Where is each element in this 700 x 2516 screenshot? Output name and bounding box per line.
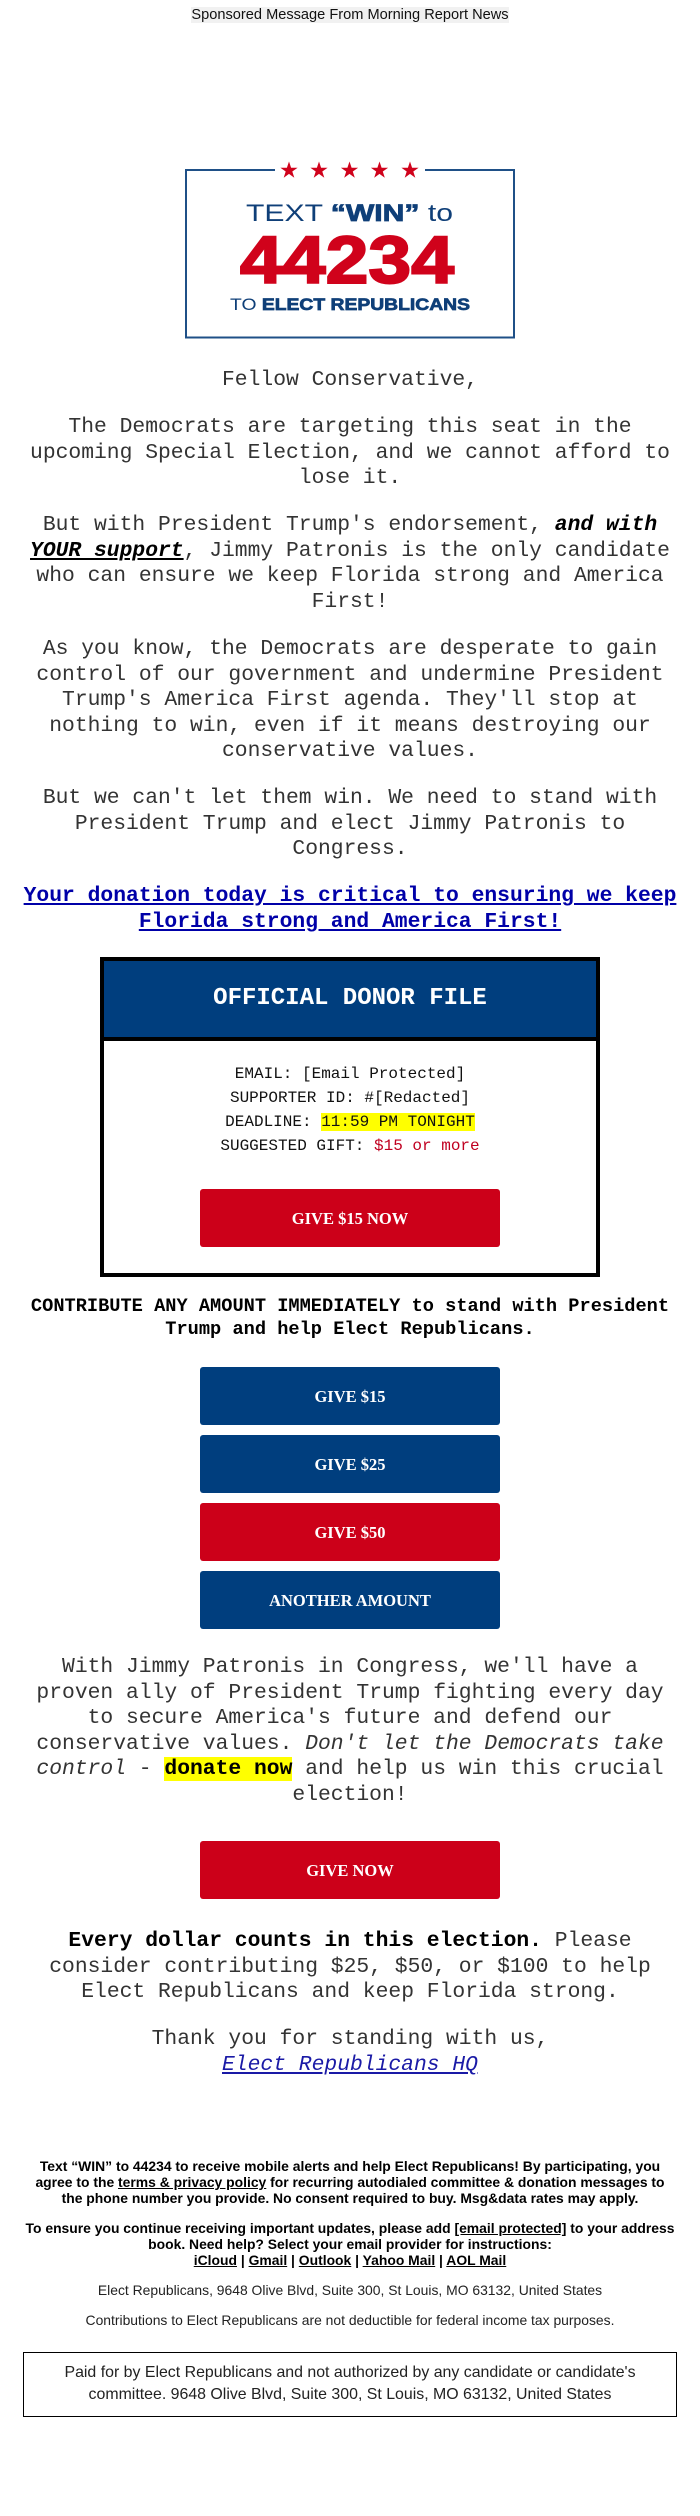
button: give 15 now xyxy=(200,1189,500,1247)
footer: sms terms: agree to the terms & privacy policy for recurring autodialed committee & donation messages to xyxy=(35,2174,665,2190)
paragraph: as you know: conservative values. xyxy=(222,739,478,763)
footer: sms terms: Text “WIN” to 44234 to receive mobile alerts and help Elect Republicans! By participating, you xyxy=(40,2158,660,2174)
paragraph: endorsement: But with President Trump's endorsement, and with xyxy=(43,513,657,537)
footer: address book xyxy=(26,2220,674,2268)
paragraph: as you know: nothing to win, even if it means destroying our xyxy=(49,714,651,738)
paragraph: stand with trump xyxy=(43,786,657,861)
donation headline link xyxy=(24,884,676,934)
paragraph: stand with trump: President Trump and elect Jimmy Patronis to xyxy=(75,812,625,836)
paid-for disclaimer box xyxy=(23,2352,677,2417)
paid-for disclaimer box: Paid for by Elect Republicans and not authorized by any candidate or candidate's xyxy=(64,2364,636,2381)
paragraph: democrats targeting: upcoming Special Election, and we cannot afford to xyxy=(30,441,670,465)
donor details: SUGGESTED GIFT: $15 or more xyxy=(220,1137,480,1155)
paragraph: every dollar counts xyxy=(49,1929,651,2004)
button: give 25: GIVE $25 xyxy=(314,1455,386,1474)
paragraph: with jimmy patronis: With Jimmy Patronis in Congress, we'll have a xyxy=(62,1655,638,1679)
paragraph: democrats targeting: lose it. xyxy=(299,466,401,490)
paragraph: with jimmy patronis: control - donate now and help us win this crucial xyxy=(36,1757,664,1781)
paragraph: as you know: As you know, the Democrats are desperate to gain xyxy=(43,637,657,661)
donor details: DEADLINE: 11:59 PM TONIGHT xyxy=(225,1113,475,1131)
paragraph: every dollar counts: Elect Republicans and keep Florida strong. xyxy=(81,1980,619,2004)
donation headline link: Your donation today is critical to ensuring we keep xyxy=(24,884,676,908)
donor details xyxy=(220,1065,480,1155)
logo line 1: TEXT “WIN” to xyxy=(246,200,453,227)
donation headline link: Florida strong and America First! xyxy=(139,910,561,934)
button: give 50: GIVE $50 xyxy=(314,1523,386,1542)
footer: address book: To ensure you continue receiving important updates, please add [email protected] to your address xyxy=(26,2220,674,2236)
paragraph: with jimmy patronis: conservative values. Don't let the Democrats take xyxy=(36,1732,664,1756)
logo stars xyxy=(280,162,419,178)
logo: text WIN to 44234 xyxy=(185,162,515,338)
sponsor line: Sponsored Message From Morning Report News xyxy=(191,7,509,23)
footer: sms terms xyxy=(35,2158,665,2206)
paragraph: with jimmy patronis: to secure America's future and defend our xyxy=(88,1706,612,1730)
donor file heading xyxy=(104,961,596,1041)
paragraph: as you know: control of our government and undermine President xyxy=(36,663,664,687)
contribute call to action: CONTRIBUTE ANY AMOUNT IMMEDIATELY to stand with President xyxy=(31,1295,669,1317)
paragraph: democrats targeting xyxy=(30,415,670,490)
button: give 15: GIVE $15 xyxy=(314,1387,386,1406)
contribute call to action xyxy=(31,1295,669,1340)
paragraph: as you know xyxy=(36,637,664,763)
sign-off: Elect Republicans HQ xyxy=(222,2053,478,2077)
logo number: 44234 xyxy=(240,223,454,298)
button: give now: GIVE NOW xyxy=(306,1861,394,1880)
paragraph: stand with trump: But we can't let them win. We need to stand with xyxy=(43,786,657,810)
paragraph: stand with trump: Congress. xyxy=(292,837,408,861)
button: give now xyxy=(200,1841,500,1899)
paragraph: democrats targeting: The Democrats are targeting this seat in the xyxy=(68,415,632,439)
footer: address: Elect Republicans, 9648 Olive Blvd, Suite 300, St Louis, MO 63132, United States xyxy=(98,2282,602,2298)
button: give 25 xyxy=(200,1435,500,1493)
paragraph: every dollar counts: Every dollar counts in this election. Please xyxy=(68,1929,632,1953)
button: give 15 now: GIVE $15 NOW xyxy=(292,1209,408,1228)
paid-for disclaimer box: committee. 9648 Olive Blvd, Suite 300, St Louis, MO 63132, United States xyxy=(89,2386,611,2403)
donor details: EMAIL: [Email Protected] xyxy=(235,1065,465,1083)
paragraph: with jimmy patronis: proven ally of President Trump fighting every day xyxy=(36,1681,664,1705)
footer: address book: iCloud | Gmail | Outlook | Yahoo Mail | AOL Mail xyxy=(194,2252,506,2268)
sign-off: Thank you for standing with us, xyxy=(152,2027,548,2051)
logo line 3: TO ELECT REPUBLICANS xyxy=(230,296,470,314)
donor file heading: OFFICIAL DONOR FILE xyxy=(213,985,487,1012)
contribute call to action: Trump and help Elect Republicans. xyxy=(165,1318,535,1340)
paragraph: every dollar counts: consider contributing $25, $50, or $100 to help xyxy=(49,1955,651,1979)
donor details: SUPPORTER ID: #[Redacted] xyxy=(230,1089,470,1107)
greeting: Fellow Conservative, xyxy=(222,368,478,392)
button: give 50 xyxy=(200,1503,500,1561)
panel: official donor file xyxy=(100,957,600,1277)
paragraph: endorsement xyxy=(30,513,670,614)
footer: sms terms: the phone number you provide. No consent required to buy. Msg&data rates may apply. xyxy=(62,2190,638,2206)
paragraph: as you know: Trump's America First agenda. They'll stop at xyxy=(62,688,638,712)
paragraph: endorsement: First! xyxy=(312,590,388,614)
paragraph: endorsement: who can ensure we keep Florida strong and America xyxy=(36,564,664,588)
footer: tax note: Contributions to Elect Republicans are not deductible for federal income tax purposes. xyxy=(86,2312,614,2328)
footer: address book: book. Need help? Select your email provider for instructions: xyxy=(148,2236,552,2252)
button: another amount xyxy=(200,1571,500,1629)
paragraph: with jimmy patronis xyxy=(36,1655,664,1807)
sign-off xyxy=(152,2027,548,2077)
button: another amount: ANOTHER AMOUNT xyxy=(269,1591,431,1610)
button: give 15 xyxy=(200,1367,500,1425)
paragraph: with jimmy patronis: election! xyxy=(292,1783,408,1807)
logo frame xyxy=(186,170,514,338)
paragraph: endorsement: YOUR support, Jimmy Patronis is the only candidate xyxy=(30,539,670,563)
